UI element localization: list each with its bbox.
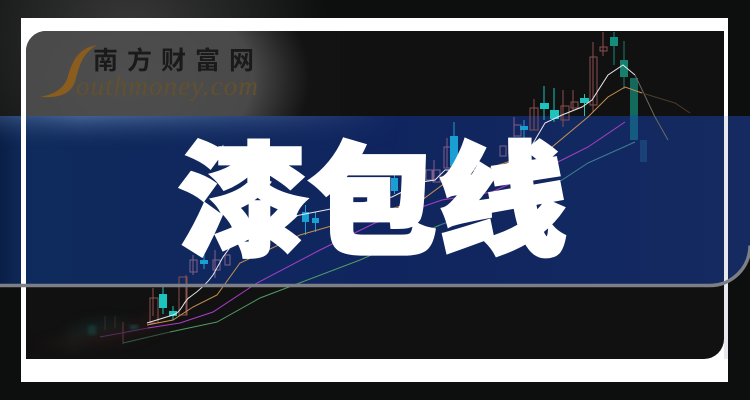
white MA line <box>147 65 635 323</box>
teal MA line <box>440 142 635 225</box>
faded low-left candles <box>88 325 138 335</box>
red candles inside band <box>190 117 521 278</box>
green MA line <box>170 225 440 332</box>
site logo <box>40 42 263 101</box>
logo chinese name: 南方财富网 <box>93 42 263 77</box>
logo swoosh S <box>40 45 97 97</box>
orange MA line <box>147 87 642 325</box>
logo url: outhmoney.com <box>76 71 259 101</box>
red candles above band <box>530 32 607 130</box>
fading MA line <box>635 75 668 140</box>
cyan candles <box>159 86 589 320</box>
moving average lines <box>100 65 690 343</box>
faint purple tail <box>100 328 148 337</box>
purple MA line <box>148 122 625 328</box>
faint green tail <box>123 332 170 343</box>
red candles <box>105 275 187 344</box>
candlestick chart <box>74 32 690 344</box>
fading teal candles <box>610 32 647 162</box>
title: 漆包线 <box>179 136 569 270</box>
blurred low-left haze <box>74 316 164 344</box>
fading orange MA line <box>642 93 690 113</box>
blue title band <box>0 116 750 284</box>
blue candles <box>200 120 528 269</box>
